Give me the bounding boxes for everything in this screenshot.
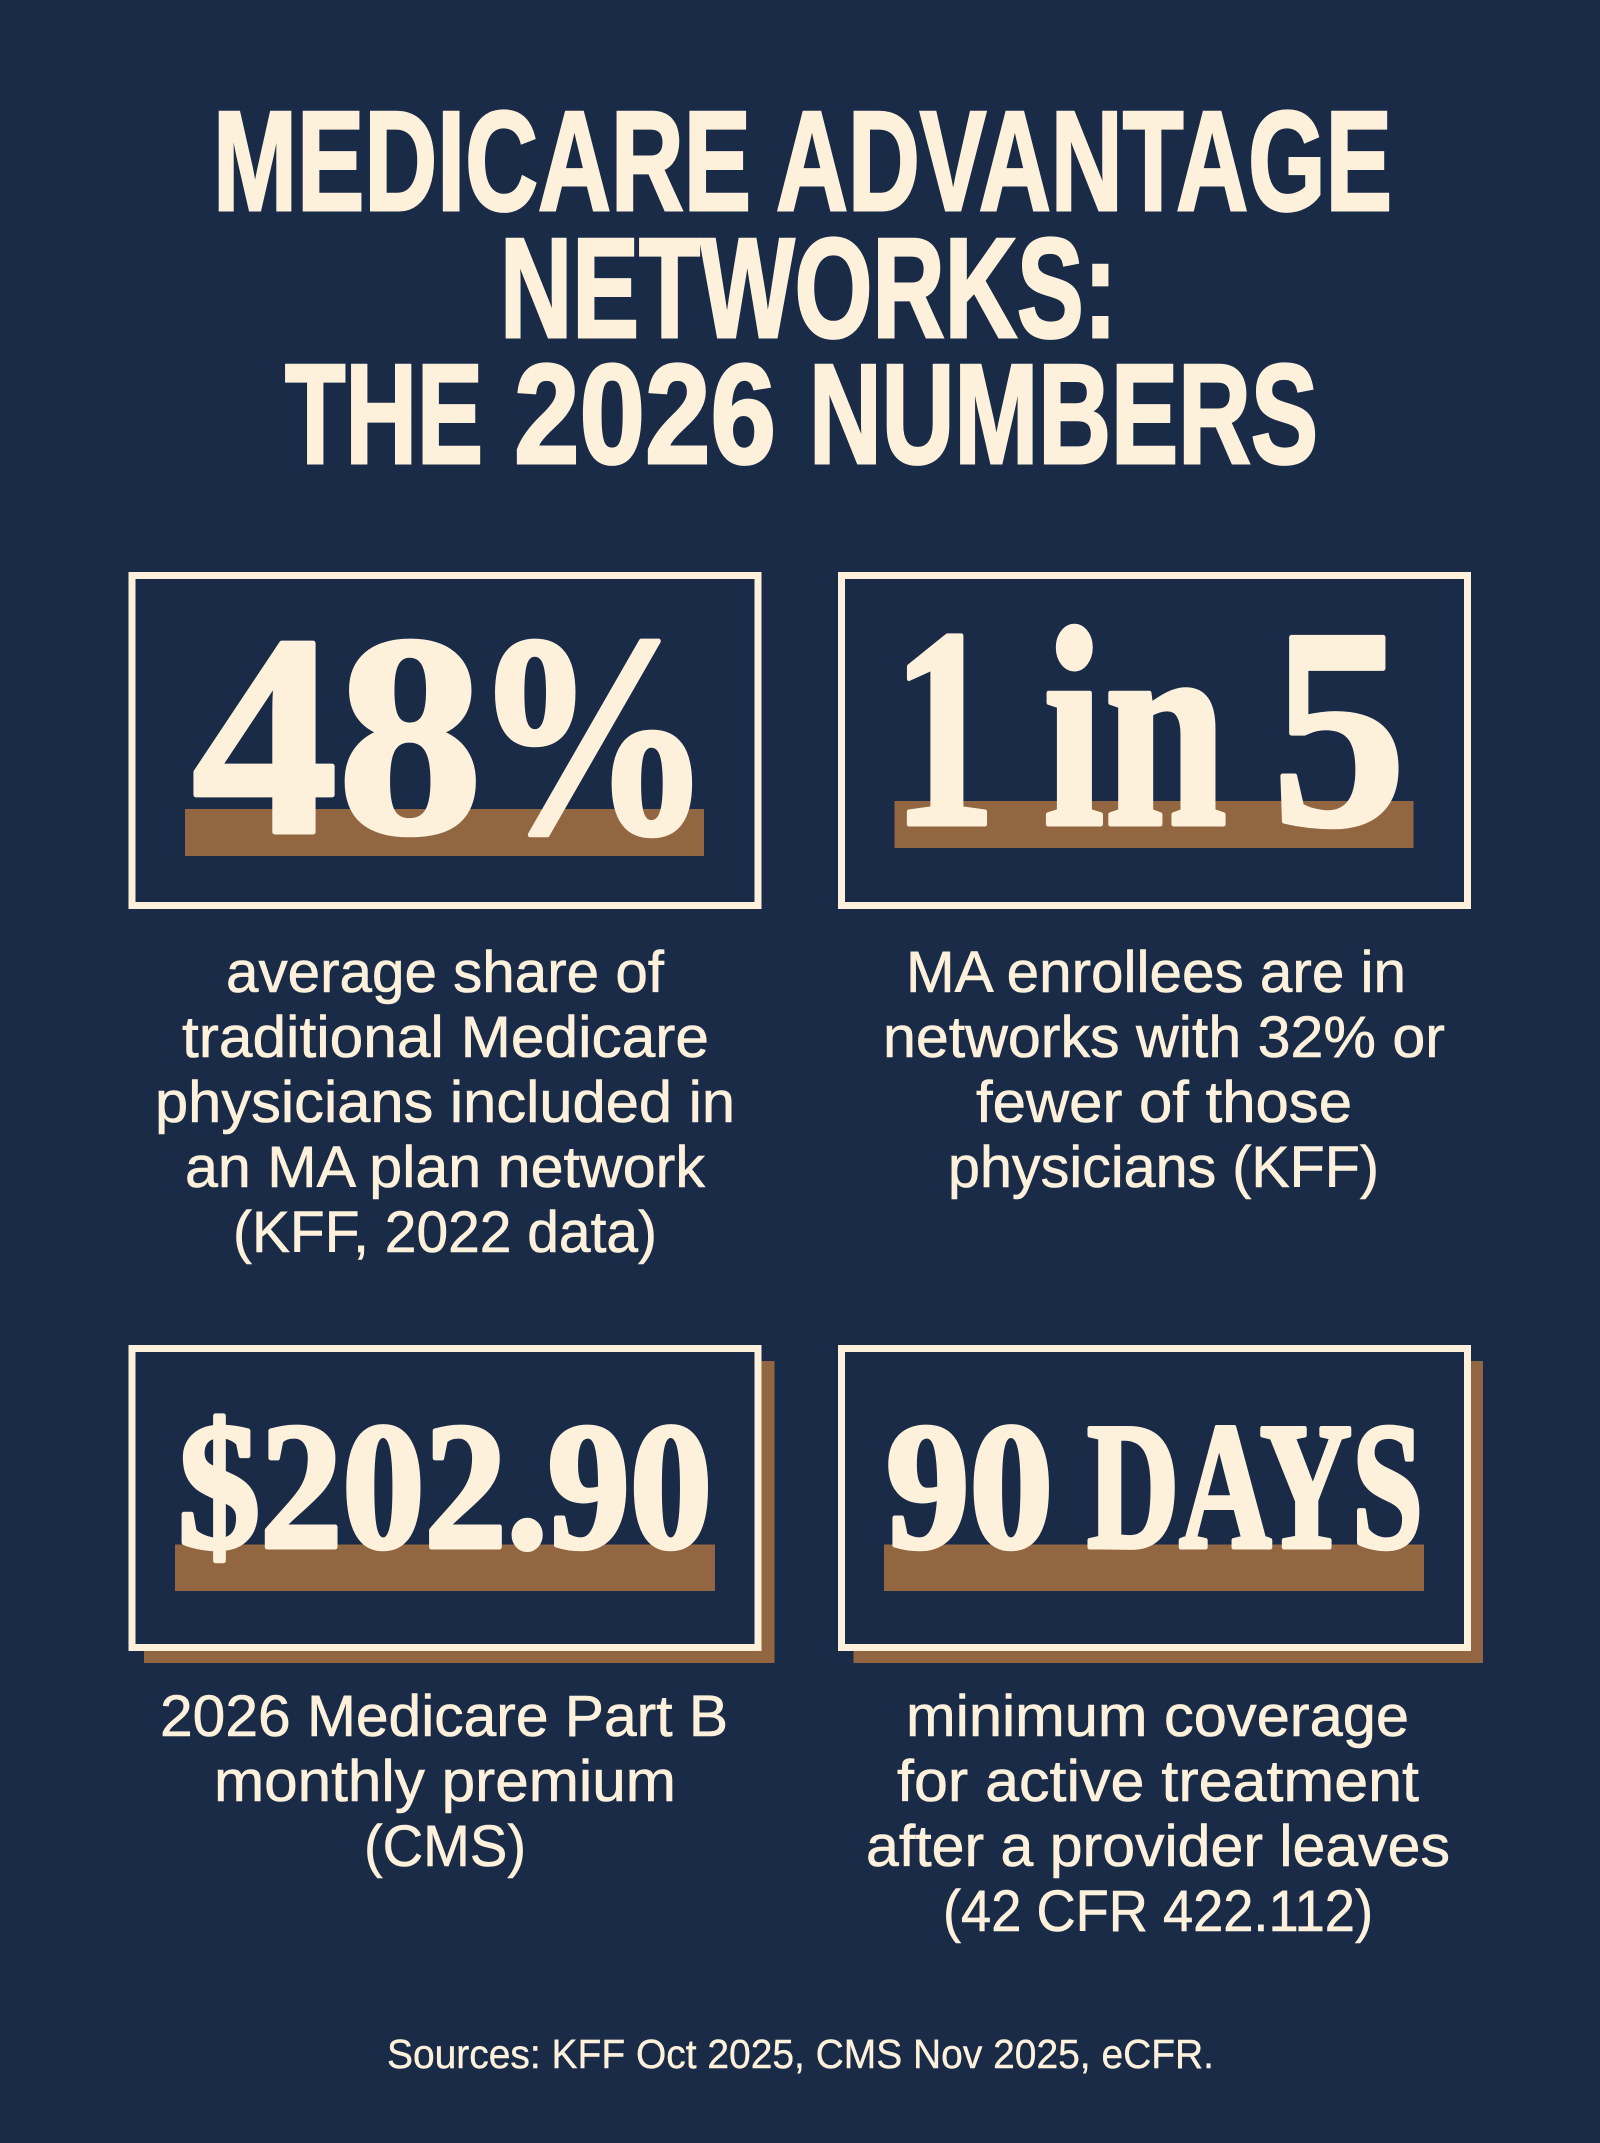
stat value: DAYS [1087, 1387, 1423, 1587]
stat value: $202.90 [178, 1387, 712, 1587]
panel: 90 days stat [842, 1348, 1483, 1663]
description: 90 days stat: for active treatment [897, 1749, 1419, 1814]
description: $202.90 stat: 2026 Medicare Part B [160, 1684, 728, 1749]
offset shadow [854, 1361, 1483, 1663]
stat value: in [1043, 570, 1227, 886]
description: 48% stat: average share of [226, 940, 665, 1005]
description: 1 in 5 stat: fewer of those [976, 1070, 1352, 1135]
stat value [886, 1387, 1423, 1587]
description: 48% stat: (KFF, 2022 data) [233, 1200, 657, 1265]
stat frame [842, 576, 1468, 906]
title [213, 82, 1392, 494]
stat value [892, 570, 1406, 886]
description: 1 in 5 stat: physicians (KFF) [948, 1135, 1379, 1200]
description: 1 in 5 stat: networks with 32% or [883, 1005, 1445, 1070]
description: 90 days stat [866, 1684, 1450, 1944]
highlight bar [185, 809, 704, 856]
stat frame [132, 1348, 758, 1648]
description: 1 in 5 stat [883, 940, 1445, 1200]
description: $202.90 stat: monthly premium [214, 1749, 676, 1814]
stat value: 48 [192, 577, 483, 895]
highlight bar [894, 801, 1414, 848]
highlight bar [175, 1544, 715, 1591]
description: 48% stat: traditional Medicare [182, 1005, 709, 1070]
title: MEDICARE [213, 82, 751, 241]
panel: $202.90 stat [132, 1348, 774, 1663]
description: 48% stat [155, 940, 735, 1265]
description: $202.90 stat [160, 1684, 728, 1879]
description: 90 days stat: minimum coverage [906, 1684, 1409, 1749]
highlight bar [884, 1544, 1424, 1591]
description: $202.90 stat: (CMS) [364, 1814, 526, 1879]
stat value: 5 [1272, 570, 1406, 886]
description: 1 in 5 stat: MA enrollees are in [906, 940, 1406, 1005]
title: NETWORKS: [500, 209, 1117, 368]
panel: 48% stat [132, 576, 758, 906]
description: 48% stat: an MA plan network [185, 1135, 706, 1200]
panel: 1 in 5 stat [842, 570, 1468, 906]
title: THE [285, 335, 483, 494]
stat frame [842, 1348, 1468, 1648]
stat value [192, 577, 712, 895]
stat value: 1 [892, 570, 996, 886]
stat value: % [472, 577, 712, 895]
title: NUMBERS [809, 335, 1318, 494]
description: 48% stat: physicians included in [155, 1070, 735, 1135]
offset shadow [144, 1361, 774, 1663]
stat value: 90 [886, 1387, 1053, 1587]
source note: Sources: KFF Oct 2025, CMS Nov 2025, eCFR. [387, 2031, 1214, 2077]
title: 2026 [514, 335, 776, 494]
description: 90 days stat: after a provider leaves [866, 1814, 1450, 1879]
stat frame [132, 576, 758, 906]
description: 90 days stat: (42 CFR 422.112) [943, 1879, 1373, 1944]
